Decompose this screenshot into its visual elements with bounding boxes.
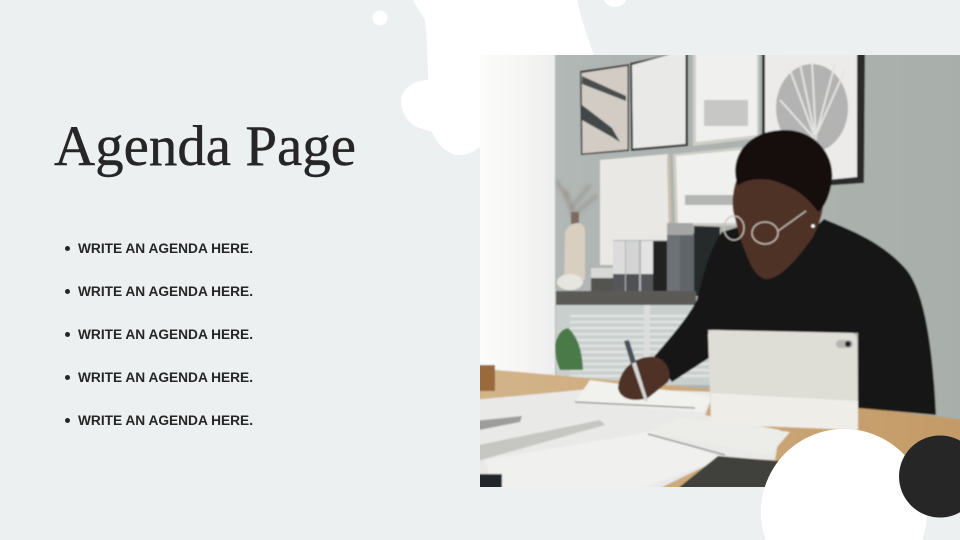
plant [555, 328, 583, 370]
head [733, 170, 823, 279]
table [474, 368, 960, 493]
shirt [653, 219, 936, 415]
glasses [724, 211, 806, 244]
shelf and radiator [556, 291, 721, 385]
agenda item 2: WRITE AN AGENDA HERE. [78, 284, 253, 299]
picture frames [580, 50, 865, 265]
binders [613, 223, 720, 296]
photo: man writing at desk [474, 49, 960, 493]
papers [474, 380, 790, 493]
large white circle [761, 429, 927, 540]
tablet [708, 330, 858, 430]
wall [554, 55, 960, 420]
curtain [474, 49, 555, 375]
white dot at top edge [604, 0, 626, 7]
agenda item 1: WRITE AN AGENDA HERE. [78, 241, 253, 256]
dark circle [899, 435, 960, 518]
title: Agenda Page [54, 115, 356, 178]
white blob shape [401, 0, 594, 155]
agenda item 3: WRITE AN AGENDA HERE. [78, 327, 253, 342]
hand and pen [618, 340, 669, 402]
vase and dried branches [556, 180, 613, 291]
agenda item 5: WRITE AN AGENDA HERE. [78, 413, 253, 428]
agenda item 4: WRITE AN AGENDA HERE. [78, 370, 253, 385]
small white dot [372, 10, 388, 26]
agenda list [65, 241, 253, 428]
